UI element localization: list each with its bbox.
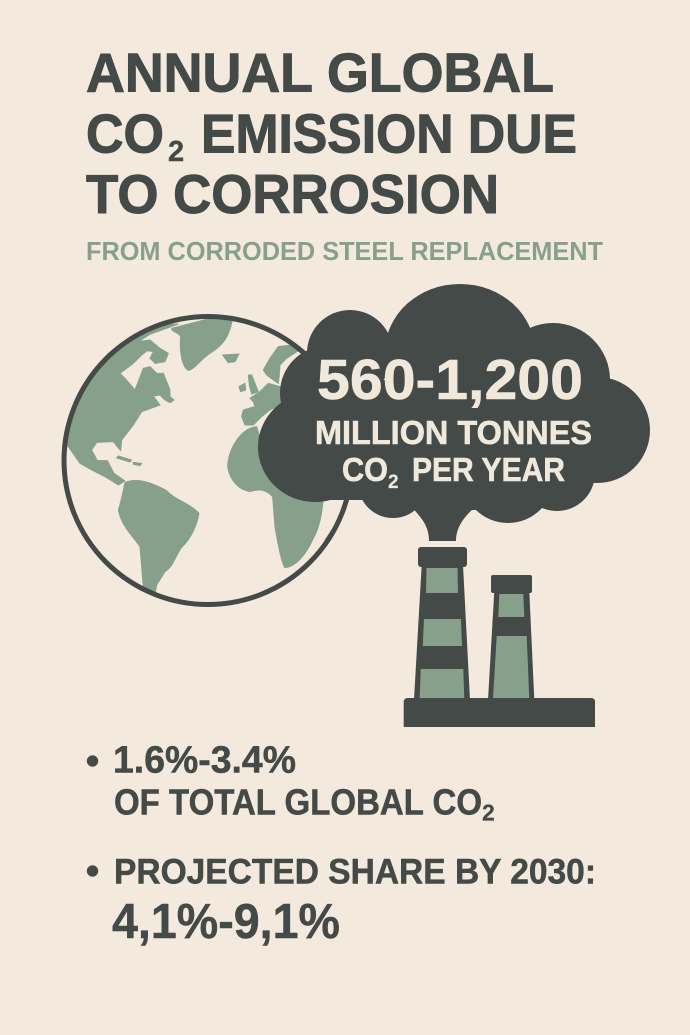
cloud figure text: 560-1,200 (317, 348, 583, 412)
bullet: share of total CO2: OF TOTAL GLOBAL CO (114, 782, 482, 822)
icon: factory chimneys (404, 547, 595, 727)
bullet: projected share by 2030 (87, 852, 596, 949)
title: CO (86, 104, 164, 164)
bullet: share of total CO2 (87, 740, 495, 826)
cloud figure text: PER YEAR (412, 451, 565, 488)
small chimney (488, 575, 534, 700)
bullet: projected share by 2030: 4,1%-9,1% (112, 895, 340, 949)
large chimney (414, 547, 470, 700)
title: EMISSION DUE (201, 104, 577, 164)
bullet: share of total CO2: 1.6%-3.4% (113, 740, 296, 782)
factory base (404, 698, 595, 727)
globe continents (66, 319, 332, 595)
title: 2 (168, 136, 184, 168)
title (86, 42, 577, 225)
icon: globe (64, 316, 352, 604)
subtitle: FROM CORRODED STEEL REPLACEMENT (86, 236, 603, 266)
bullet: share of total CO2: 2 (482, 800, 495, 826)
title: ANNUAL GLOBAL (86, 42, 554, 104)
bullet: projected share by 2030: PROJECTED SHARE BY 2030: (114, 852, 596, 892)
title: TO CORROSION (86, 164, 499, 225)
cloud figure text: 2 (388, 472, 399, 493)
cloud figure text: CO (342, 451, 388, 488)
cloud figure text: MILLION TONNES (315, 414, 592, 451)
icon: smoke cloud (258, 284, 650, 541)
cloud figure text (315, 348, 592, 493)
